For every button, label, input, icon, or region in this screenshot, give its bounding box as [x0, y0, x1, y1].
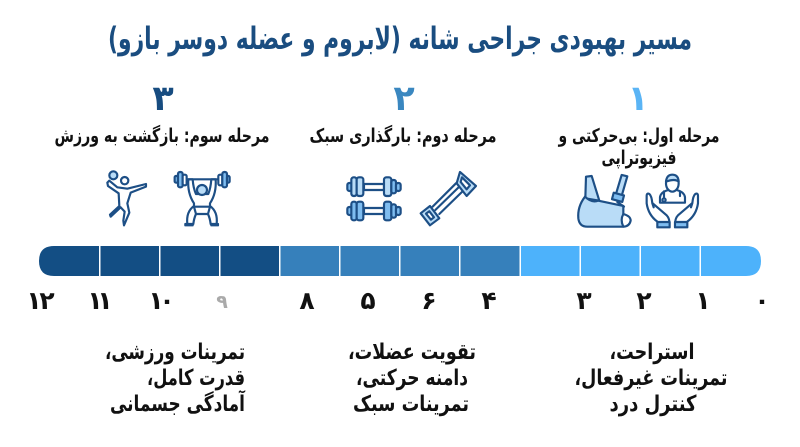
icon: arm sling — [578, 175, 631, 227]
timeline month labels: ۱ — [87, 286, 103, 315]
stage 2 heading: مرحله دوم: بارگذاری سبک — [310, 124, 496, 147]
stage 3 description — [105, 340, 245, 417]
timeline month labels: ۴ — [481, 286, 497, 315]
stage number 2: ۲ — [393, 79, 415, 119]
stage 1 heading: مرحله اول: بی‌حرکتی و — [558, 125, 720, 147]
timeline month labels: ۸ — [299, 286, 315, 315]
timeline month labels: ۱ — [97, 286, 113, 315]
icon: weightlifter — [175, 172, 230, 225]
stage 2 description: تمرینات سبک — [353, 392, 469, 417]
stage 1 description: تمرینات غیرفعال، — [574, 366, 728, 391]
timeline month labels: ۵ — [360, 286, 376, 315]
timeline month labels: ۳ — [576, 286, 592, 315]
timeline month labels: ۱ — [148, 286, 164, 315]
icon: dumbbells — [347, 177, 401, 220]
stage number 1: ۱ — [627, 79, 649, 119]
icon: doctor in caring hands — [647, 175, 698, 227]
stage 2 description: تقویت عضلات، — [348, 340, 476, 365]
stage 1 description: استراحت، — [610, 340, 694, 365]
stage 3 heading: مرحله سوم: بازگشت به ورزش — [54, 124, 270, 147]
timeline bar — [39, 246, 761, 276]
timeline month labels: ۱ — [26, 286, 42, 315]
timeline month labels: ۹ — [216, 291, 228, 313]
timeline month labels: ۰ — [159, 286, 175, 315]
icon: resistance band expander — [421, 172, 476, 225]
stage 3 description: قدرت کامل، — [147, 366, 245, 391]
stage 1 description — [574, 340, 728, 417]
stage number 3: ۳ — [152, 79, 174, 119]
timeline month labels: ۶ — [421, 286, 437, 315]
stage 3 description: تمرینات ورزشی، — [105, 340, 245, 365]
timeline month labels: ۰ — [754, 286, 770, 315]
timeline month labels — [26, 286, 770, 315]
timeline month labels: ۱ — [695, 286, 711, 315]
timeline month labels: ۲ — [636, 286, 652, 315]
stage 3 description: آمادگی جسمانی — [110, 389, 245, 417]
stage 2 description — [348, 340, 476, 417]
icon: volleyball player — [107, 171, 146, 225]
timeline month labels: ۲ — [39, 286, 55, 315]
stage 2 description: دامنه حرکتی، — [356, 366, 468, 391]
stage 1 heading: فیزیوتراپی — [602, 147, 676, 169]
stage 1 heading — [558, 125, 720, 169]
stage 1 description: کنترل درد — [610, 392, 697, 417]
